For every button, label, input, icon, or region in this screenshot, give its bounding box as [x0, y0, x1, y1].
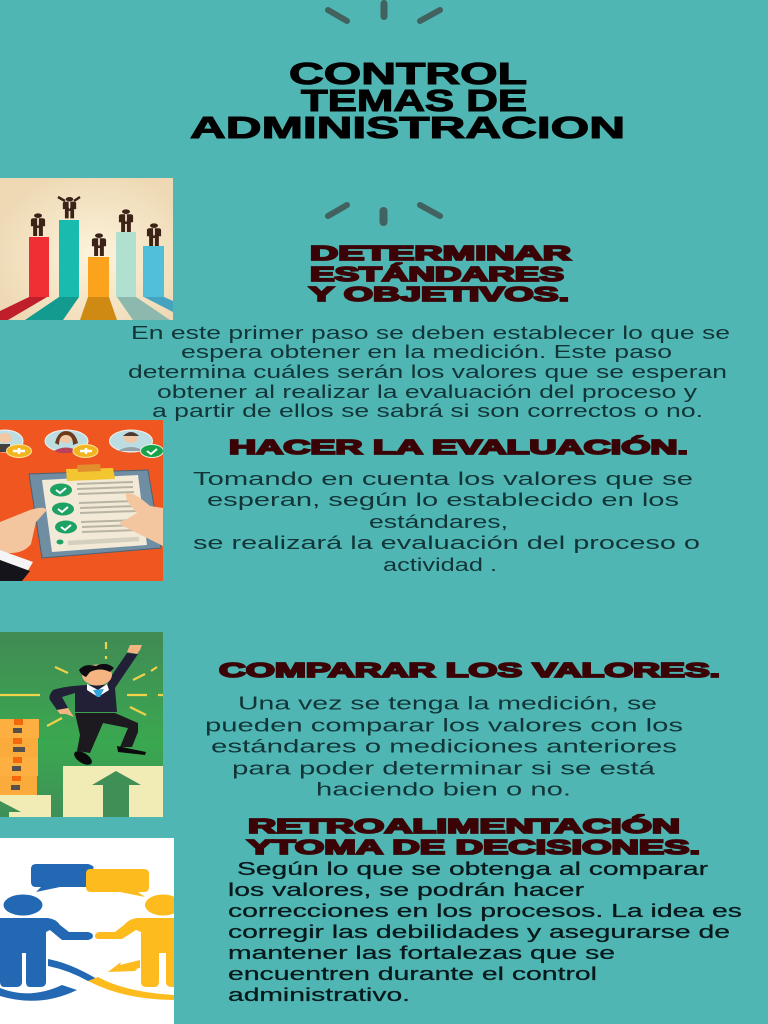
heading: comparar los valores: COMPARAR LOS VALORES.: [219, 659, 720, 682]
image: businessman climbing steps: [0, 632, 163, 817]
text block: step one: determina cuáles serán los valores que se esperan: [128, 361, 727, 382]
hands: [0, 508, 46, 553]
text block: step four: [228, 859, 742, 1005]
text block: step four: Según lo que se obtenga al comparar: [237, 859, 708, 879]
bar: blue: [143, 246, 164, 297]
heading: retroalimentacion y toma de decisiones: YTOMA DE DECISIONES.: [247, 836, 700, 859]
text block: step four: encuentren durante el control: [228, 964, 597, 984]
person: yellow: [88, 894, 181, 1000]
title: ADMINISTRACION: [190, 110, 625, 145]
steps: [0, 795, 51, 817]
text block: step one: a partir de ellos se sabrá si son correctos o no.: [152, 400, 703, 421]
text block: step four: correcciones en los procesos. La idea es: [228, 901, 742, 921]
text block: step four: administrativo.: [228, 985, 410, 1005]
heading: determinar estandares: [309, 242, 571, 306]
person: blue: [0, 894, 97, 1001]
image: checklist clipboard: [0, 420, 164, 581]
image: two people communicating: [0, 838, 181, 1024]
bar: teal: [59, 220, 79, 297]
title: TEMAS DE: [301, 83, 527, 118]
text block: step three: pueden comparar los valores con los: [205, 714, 683, 736]
heading: determinar estandares: Y OBJETIVOS.: [309, 283, 569, 306]
text block: step one: obtener al realizar la evaluación del proceso y: [157, 381, 698, 402]
text block: step two: actividad .: [383, 554, 497, 575]
clipboard: [29, 464, 161, 558]
text block: step three: haciendo bien o no.: [316, 778, 571, 800]
text block: step three: Una vez se tenga la medición, se: [238, 692, 657, 714]
boxes: [0, 719, 39, 738]
man: [49, 645, 146, 768]
icon: middle sparkle: [328, 205, 440, 222]
title: [190, 56, 625, 145]
heading: retroalimentacion y toma de decisiones: RETROALIMENTACIÓN: [248, 814, 680, 838]
text block: step two: Tomando en cuenta los valores que se: [193, 468, 693, 489]
text block: step two: [193, 468, 700, 575]
text block: step three: estándares o mediciones anteriores: [211, 736, 677, 756]
text block: step three: [205, 692, 683, 800]
heading: determinar estandares: DETERMINAR: [310, 242, 571, 265]
heading: retroalimentacion y toma de decisiones: [247, 814, 700, 859]
title: CONTROL: [289, 56, 527, 91]
text block: step four: corregir las debilidades y asegurarse de: [228, 922, 730, 942]
text block: step one: En este primer paso se deben establecer lo que se: [131, 322, 730, 343]
text block: step two: esperan, según lo establecido en los: [207, 489, 679, 510]
text block: step four: los valores, se podrán hacer: [228, 880, 584, 900]
heading: determinar estandares: ESTÁNDARES: [310, 263, 564, 286]
bar: mint: [116, 232, 136, 297]
speech bubble: yellow: [86, 869, 149, 897]
bar: orange: [88, 257, 109, 297]
text block: step one: espera obtener en la medición. Este paso: [181, 341, 672, 362]
icon: top sparkle: [328, 4, 440, 21]
image: podium bars with people: [0, 178, 173, 320]
text block: step one: [128, 322, 730, 421]
heading: hacer la evaluacion: HACER LA EVALUACIÓN.: [229, 435, 688, 459]
speech bubble: blue: [31, 864, 94, 892]
text block: step two: estándares,: [369, 511, 508, 532]
bar: red: [29, 237, 49, 297]
text block: step three: para poder determinar si se está: [232, 758, 656, 778]
text block: step four: mantener las fortalezas que se: [228, 943, 615, 963]
text block: step two: se realizará la evaluación del proceso o: [193, 532, 700, 553]
